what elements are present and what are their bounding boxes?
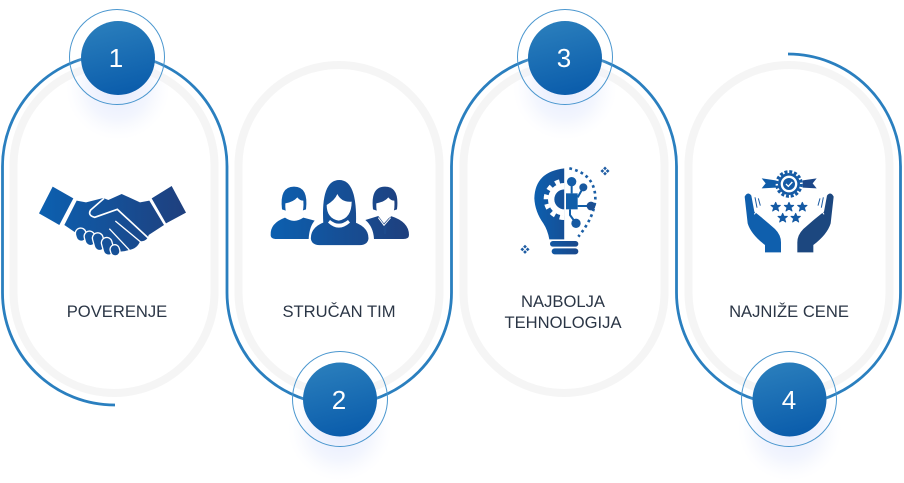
icon: handshake bbox=[39, 186, 186, 257]
label: NAJNIŽE CENE: NAJNIŽE CENE bbox=[729, 302, 849, 321]
panel: card 2 outline bbox=[238, 65, 440, 393]
badge 3: 3 bbox=[557, 43, 571, 73]
label: NAJBOLJA TEHNOLOGIJA bbox=[504, 292, 622, 332]
blue connecting wave line bbox=[2, 54, 901, 405]
badge 1: 1 bbox=[109, 43, 123, 73]
badge 4: 4 bbox=[782, 385, 796, 415]
panel: card 4 outline bbox=[688, 65, 890, 393]
icon: team of three people bbox=[271, 180, 409, 246]
icon: light bulb with gear and circuit bbox=[520, 166, 610, 254]
label: NAJBOLJA TEHNOLOGIJA: NAJBOLJA bbox=[521, 292, 606, 311]
panel: card 3 outline bbox=[464, 65, 664, 393]
badge 3 bbox=[513, 10, 617, 140]
badge 2 bbox=[288, 352, 392, 481]
badge 2: 2 bbox=[332, 385, 346, 415]
badge 4 bbox=[738, 352, 842, 481]
badge 1 bbox=[66, 10, 170, 140]
label: STRUČAN TIM: STRUČAN TIM bbox=[282, 302, 396, 321]
icon: sparkle bottom left bbox=[520, 245, 530, 254]
icon: sparkle top right bbox=[600, 166, 610, 176]
panel: card 1 outline bbox=[14, 65, 214, 393]
icon: hands holding award and stars bbox=[745, 172, 834, 252]
label: POVERENJE: POVERENJE bbox=[67, 302, 167, 321]
label: NAJBOLJA TEHNOLOGIJA: TEHNOLOGIJA bbox=[504, 313, 622, 332]
